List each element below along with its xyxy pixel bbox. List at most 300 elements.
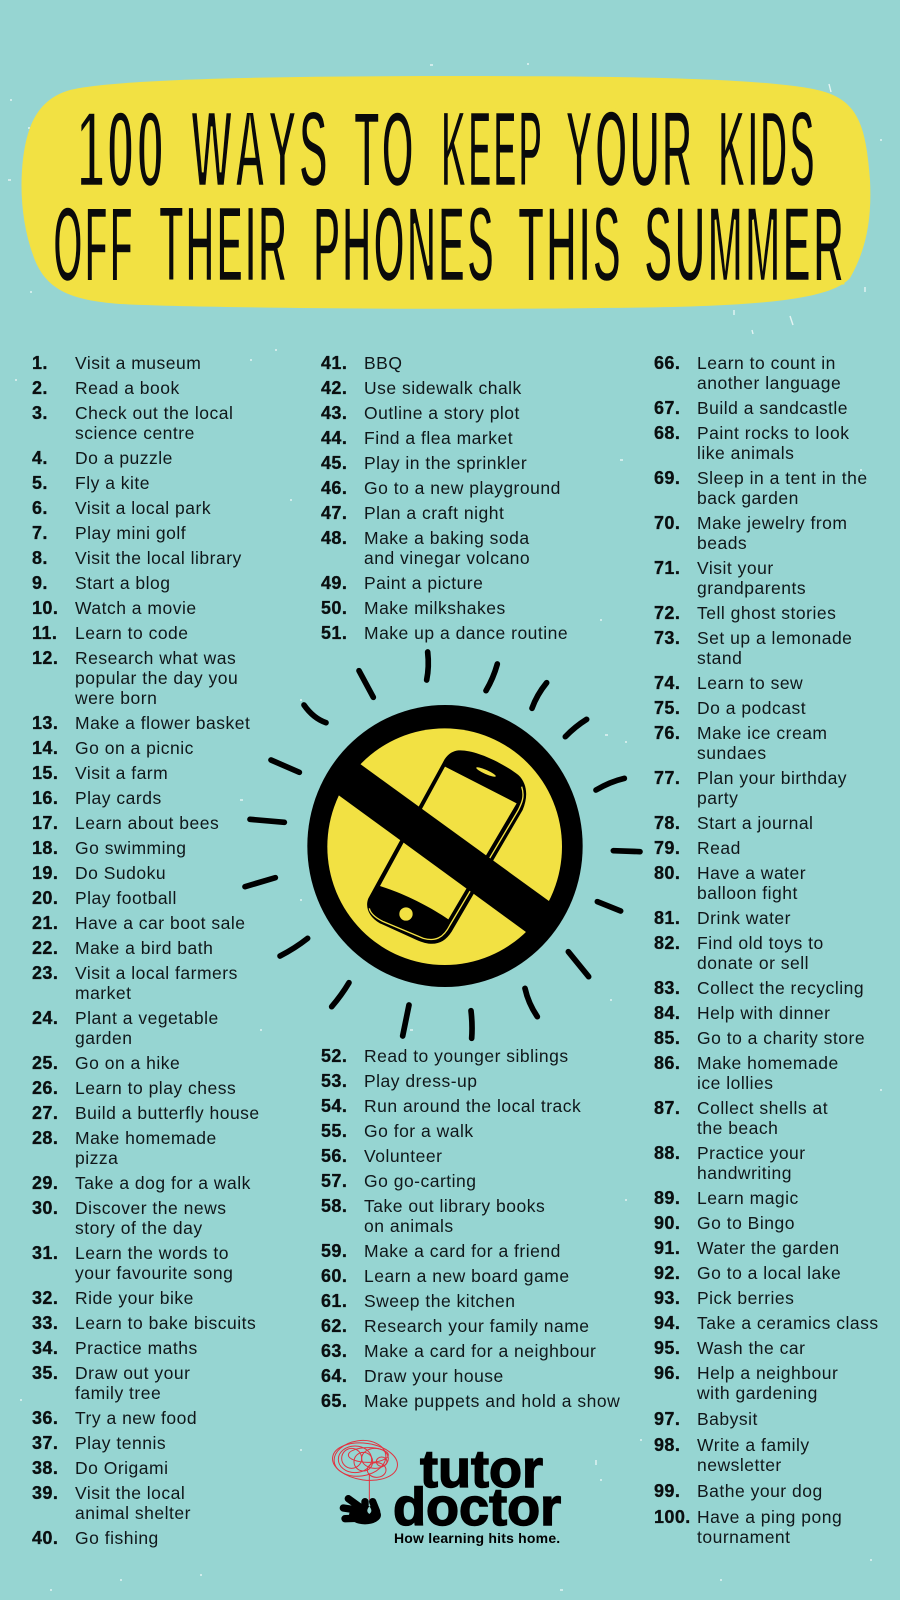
- item 18: 18.: [32, 838, 58, 858]
- item 9: [32, 573, 170, 593]
- item 24: Plant a vegetable: [75, 1008, 219, 1028]
- sign disc: [307, 705, 583, 987]
- item 28: pizza: [75, 1148, 118, 1168]
- item 35: family tree: [75, 1383, 161, 1403]
- item 17: 17.: [32, 813, 58, 833]
- item 66: Learn to count in: [697, 353, 836, 373]
- item 68: like animals: [697, 443, 794, 463]
- item 67: 67.: [654, 398, 680, 418]
- item 52: Read to younger siblings: [364, 1046, 569, 1066]
- item 65: 65.: [321, 1391, 347, 1411]
- item 9: Start a blog: [75, 573, 170, 593]
- title text: THIS: [518, 182, 623, 306]
- item 42: 42.: [321, 378, 347, 398]
- item 82: donate or sell: [697, 953, 809, 973]
- item 79: [654, 838, 879, 858]
- item 37: [32, 1433, 166, 1453]
- item 91: 91.: [654, 1238, 680, 1258]
- item 15: 15.: [32, 763, 58, 783]
- item 51: 51.: [321, 623, 347, 643]
- item 3: 3.: [32, 403, 48, 423]
- item 38: Do Origami: [75, 1458, 168, 1478]
- item 69: Sleep in a tent in the: [697, 468, 868, 488]
- item 31: 31.: [32, 1243, 58, 1263]
- item 73: 73.: [654, 628, 680, 648]
- item 98: [654, 1435, 879, 1475]
- item 34: Practice maths: [75, 1338, 198, 1358]
- item 24: 24.: [32, 1008, 58, 1028]
- item 90: 90.: [654, 1213, 680, 1233]
- item 30: 30.: [32, 1198, 58, 1218]
- item 73: stand: [697, 648, 742, 668]
- item 66: 66.: [654, 353, 680, 373]
- item 86: ice lollies: [697, 1073, 774, 1093]
- item 3: science centre: [75, 423, 195, 443]
- item 97: [654, 1409, 879, 1429]
- item 82: Find old toys to: [697, 933, 824, 953]
- item 70: [654, 513, 879, 553]
- item 3: Check out the local: [75, 403, 233, 423]
- item 59: [321, 1241, 620, 1261]
- item 30: [32, 1198, 226, 1238]
- item 5: 5.: [32, 473, 48, 493]
- item 77: 77.: [654, 768, 680, 788]
- list column 2 bottom: items 52 to 65: [321, 1046, 620, 1416]
- item 56: 56.: [321, 1146, 347, 1166]
- item 91: [654, 1238, 879, 1258]
- item 40: [32, 1528, 260, 1548]
- list column 1: items 1 to 40: [32, 353, 260, 1548]
- item 45: 45.: [321, 453, 347, 473]
- wordmark: doctor: [393, 1478, 561, 1537]
- icon: red scribble brain: [330, 1437, 400, 1500]
- item 71: Visit your: [697, 558, 774, 578]
- item 37: Play tennis: [75, 1433, 166, 1453]
- item 100: 100.: [654, 1507, 691, 1527]
- item 80: Have a water: [697, 863, 806, 883]
- item 33: Learn to bake biscuits: [75, 1313, 256, 1333]
- item 23: [32, 963, 238, 1003]
- banner shape: [21, 76, 870, 309]
- title text: WAYS: [191, 87, 330, 211]
- item 68: Paint rocks to look: [697, 423, 849, 443]
- item 93: [654, 1288, 879, 1308]
- item 48: and vinegar volcano: [364, 548, 530, 568]
- item 58: 58.: [321, 1196, 347, 1216]
- item 99: [654, 1481, 879, 1501]
- item 55: Go for a walk: [364, 1121, 474, 1141]
- item 95: [654, 1338, 879, 1358]
- item 15: [32, 763, 168, 783]
- item 87: [654, 1098, 879, 1138]
- item 45: Play in the sprinkler: [364, 453, 527, 473]
- item 87: 87.: [654, 1098, 680, 1118]
- item 84: 84.: [654, 1003, 680, 1023]
- item 52: 52.: [321, 1046, 347, 1066]
- item 81: [654, 908, 879, 928]
- item 23: Visit a local farmers: [75, 963, 238, 983]
- item 19: 19.: [32, 863, 58, 883]
- item 5: Fly a kite: [75, 473, 150, 493]
- item 47: Plan a craft night: [364, 503, 504, 523]
- item 61: 61.: [321, 1291, 347, 1311]
- item 49: 49.: [321, 573, 347, 593]
- item 39: animal shelter: [75, 1503, 191, 1523]
- item 73: [654, 628, 879, 668]
- item 66: [654, 353, 879, 393]
- item 1: 1.: [32, 353, 48, 373]
- item 98: Write a family: [697, 1435, 810, 1455]
- item 85: Go to a charity store: [697, 1028, 865, 1048]
- item 72: Tell ghost stories: [697, 603, 836, 623]
- phone: [367, 750, 526, 944]
- item 49: Paint a picture: [364, 573, 483, 593]
- item 64: 64.: [321, 1366, 347, 1386]
- item 4: 4.: [32, 448, 48, 468]
- list column 2 top: items 41 to 51: [321, 353, 568, 648]
- item 29: 29.: [32, 1173, 58, 1193]
- tagline: How learning hits home.: [394, 1530, 560, 1546]
- item 39: [32, 1483, 191, 1523]
- item 7: Play mini golf: [75, 523, 186, 543]
- item 93: 93.: [654, 1288, 680, 1308]
- item 20: 20.: [32, 888, 58, 908]
- item 53: Play dress-up: [364, 1071, 478, 1091]
- item 23: market: [75, 983, 131, 1003]
- item 80: [654, 863, 879, 903]
- item 72: [654, 603, 879, 623]
- item 62: Research your family name: [364, 1316, 590, 1336]
- item 16: 16.: [32, 788, 58, 808]
- item 92: Go to a local lake: [697, 1263, 841, 1283]
- item 1: Visit a museum: [75, 353, 201, 373]
- item 54: Run around the local track: [364, 1096, 581, 1116]
- item 72: 72.: [654, 603, 680, 623]
- item 50: [321, 598, 568, 618]
- item 34: 34.: [32, 1338, 58, 1358]
- item 30: Discover the news: [75, 1198, 226, 1218]
- wordmark: tutor: [420, 1440, 543, 1499]
- title text: YOUR: [565, 88, 694, 211]
- item 51: Make up a dance routine: [364, 623, 568, 643]
- item 41: 41.: [321, 353, 347, 373]
- item 43: Outline a story plot: [364, 403, 520, 423]
- item 3: [32, 403, 233, 443]
- item 58: [321, 1196, 620, 1236]
- item 24: garden: [75, 1028, 132, 1048]
- item 41: [321, 353, 568, 373]
- item 97: Babysit: [697, 1409, 758, 1429]
- item 37: 37.: [32, 1433, 58, 1453]
- item 94: 94.: [654, 1313, 680, 1333]
- item 99: Bathe your dog: [697, 1481, 823, 1501]
- item 96: [654, 1363, 879, 1403]
- item 86: 86.: [654, 1053, 680, 1073]
- item 12: were born: [75, 688, 157, 708]
- item 42: [321, 378, 568, 398]
- item 45: [321, 453, 568, 473]
- item 27: 27.: [32, 1103, 58, 1123]
- item 44: Find a flea market: [364, 428, 513, 448]
- item 73: Set up a lemonade: [697, 628, 852, 648]
- item 70: Make jewelry from: [697, 513, 847, 533]
- item 20: Play football: [75, 888, 177, 908]
- item 38: [32, 1458, 168, 1478]
- title text: PHONES: [313, 183, 496, 306]
- item 10: 10.: [32, 598, 58, 618]
- item 69: 69.: [654, 468, 680, 488]
- item 88: handwriting: [697, 1163, 792, 1183]
- item 14: 14.: [32, 738, 58, 758]
- item 26: 26.: [32, 1078, 58, 1098]
- item 24: [32, 1008, 219, 1048]
- item 96: 96.: [654, 1363, 680, 1383]
- item 96: with gardening: [697, 1383, 818, 1403]
- item 84: [654, 1003, 879, 1023]
- item 40: 40.: [32, 1528, 58, 1548]
- item 89: 89.: [654, 1188, 680, 1208]
- item 87: the beach: [697, 1118, 778, 1138]
- item 8: Visit the local library: [75, 548, 242, 568]
- item 7: 7.: [32, 523, 48, 543]
- rays: [245, 652, 640, 1038]
- item 41: BBQ: [364, 353, 402, 373]
- item 14: Go on a picnic: [75, 738, 194, 758]
- item 69: back garden: [697, 488, 799, 508]
- item 68: [654, 423, 879, 463]
- item 18: Go swimming: [75, 838, 186, 858]
- item 49: [321, 573, 568, 593]
- item 88: Practice your: [697, 1143, 806, 1163]
- item 91: Water the garden: [697, 1238, 840, 1258]
- item 63: 63.: [321, 1341, 347, 1361]
- item 63: Make a card for a neighbour: [364, 1341, 596, 1361]
- item 80: balloon fight: [697, 883, 798, 903]
- item 15: Visit a farm: [75, 763, 168, 783]
- item 81: 81.: [654, 908, 680, 928]
- item 57: [321, 1171, 620, 1191]
- item 2: 2.: [32, 378, 48, 398]
- title text: OFF: [53, 183, 135, 306]
- item 36: Try a new food: [75, 1408, 197, 1428]
- item 21: Have a car boot sale: [75, 913, 246, 933]
- item 48: Make a baking soda: [364, 528, 530, 548]
- item 69: [654, 468, 879, 508]
- item 95: 95.: [654, 1338, 680, 1358]
- item 64: [321, 1366, 620, 1386]
- item 48: [321, 528, 568, 568]
- item 9: 9.: [32, 573, 48, 593]
- item 39: Visit the local: [75, 1483, 185, 1503]
- item 71: [654, 558, 879, 598]
- item 55: [321, 1121, 620, 1141]
- item 78: Start a journal: [697, 813, 813, 833]
- item 56: [321, 1146, 620, 1166]
- item 92: [654, 1263, 879, 1283]
- item 38: 38.: [32, 1458, 58, 1478]
- item 47: [321, 503, 568, 523]
- item 92: 92.: [654, 1263, 680, 1283]
- title text: SUMMER: [644, 182, 846, 306]
- item 30: story of the day: [75, 1218, 203, 1238]
- item 22: 22.: [32, 938, 58, 958]
- item 57: 57.: [321, 1171, 347, 1191]
- item 59: Make a card for a friend: [364, 1241, 561, 1261]
- item 74: Learn to sew: [697, 673, 803, 693]
- item 12: popular the day you: [75, 668, 238, 688]
- item 44: [321, 428, 568, 448]
- item 8: 8.: [32, 548, 48, 568]
- item 32: Ride your bike: [75, 1288, 194, 1308]
- item 85: 85.: [654, 1028, 680, 1048]
- title text: THEIR: [159, 182, 289, 306]
- item 98: newsletter: [697, 1455, 782, 1475]
- item 77: Plan your birthday: [697, 768, 847, 788]
- item 16: [32, 788, 162, 808]
- item 61: [321, 1291, 620, 1311]
- item 17: Learn about bees: [75, 813, 219, 833]
- item 31: Learn the words to: [75, 1243, 229, 1263]
- item 100: Have a ping pong: [697, 1507, 842, 1527]
- item 59: 59.: [321, 1241, 347, 1261]
- item 79: Read: [697, 838, 741, 858]
- title text: KEEP: [441, 89, 544, 211]
- item 25: Go on a hike: [75, 1053, 180, 1073]
- item 53: [321, 1071, 620, 1091]
- item 86: Make homemade: [697, 1053, 839, 1073]
- item 60: Learn a new board game: [364, 1266, 570, 1286]
- item 6: Visit a local park: [75, 498, 211, 518]
- item 16: Play cards: [75, 788, 162, 808]
- item 77: party: [697, 788, 738, 808]
- item 86: [654, 1053, 879, 1093]
- sign inner yellow: [327, 728, 562, 965]
- item 64: Draw your house: [364, 1366, 504, 1386]
- item 27: Build a butterfly house: [75, 1103, 260, 1123]
- item 10: Watch a movie: [75, 598, 197, 618]
- item 66: another language: [697, 373, 841, 393]
- title text: KIDS: [718, 88, 817, 211]
- item 25: 25.: [32, 1053, 58, 1073]
- item 100: [654, 1507, 879, 1547]
- item 68: 68.: [654, 423, 680, 443]
- item 4: Do a puzzle: [75, 448, 173, 468]
- item 12: 12.: [32, 648, 58, 668]
- item 55: 55.: [321, 1121, 347, 1141]
- item 43: [321, 403, 568, 423]
- item 71: 71.: [654, 558, 680, 578]
- item 53: 53.: [321, 1071, 347, 1091]
- item 62: 62.: [321, 1316, 347, 1336]
- item 12: [32, 648, 238, 708]
- title text: TO: [354, 88, 416, 211]
- item 67: [654, 398, 879, 418]
- item 50: 50.: [321, 598, 347, 618]
- item 83: Collect the recycling: [697, 978, 864, 998]
- item 23: 23.: [32, 963, 58, 983]
- item 29: Take a dog for a walk: [75, 1173, 251, 1193]
- item 93: Pick berries: [697, 1288, 794, 1308]
- item 65: Make puppets and hold a show: [364, 1391, 620, 1411]
- item 13: Make a flower basket: [75, 713, 250, 733]
- item 44: 44.: [321, 428, 347, 448]
- item 52: [321, 1046, 620, 1066]
- item 5: [32, 473, 150, 493]
- item 46: 46.: [321, 478, 347, 498]
- item 100: tournament: [697, 1527, 791, 1547]
- item 39: 39.: [32, 1483, 58, 1503]
- item 61: Sweep the kitchen: [364, 1291, 516, 1311]
- item 75: [654, 698, 879, 718]
- item 75: Do a podcast: [697, 698, 806, 718]
- item 46: Go to a new playground: [364, 478, 561, 498]
- item 96: Help a neighbour: [697, 1363, 838, 1383]
- item 22: Make a bird bath: [75, 938, 213, 958]
- item 74: [654, 673, 879, 693]
- item 88: [654, 1143, 879, 1183]
- item 70: 70.: [654, 513, 680, 533]
- item 28: Make homemade: [75, 1128, 217, 1148]
- item 19: Do Sudoku: [75, 863, 166, 883]
- item 28: 28.: [32, 1128, 58, 1148]
- list column 3: items 66 to 100: [654, 353, 879, 1552]
- item 21: 21.: [32, 913, 58, 933]
- item 2: Read a book: [75, 378, 180, 398]
- item 19: [32, 863, 166, 883]
- item 78: 78.: [654, 813, 680, 833]
- item 58: Take out library books: [364, 1196, 545, 1216]
- item 77: [654, 768, 879, 808]
- item 57: Go go-carting: [364, 1171, 477, 1191]
- item 89: [654, 1188, 879, 1208]
- item 54: 54.: [321, 1096, 347, 1116]
- item 90: [654, 1213, 879, 1233]
- title text: 100: [77, 89, 166, 212]
- item 82: [654, 933, 879, 973]
- item 6: 6.: [32, 498, 48, 518]
- item 50: Make milkshakes: [364, 598, 506, 618]
- item 32: 32.: [32, 1288, 58, 1308]
- item 75: 75.: [654, 698, 680, 718]
- item 76: 76.: [654, 723, 680, 743]
- item 82: 82.: [654, 933, 680, 953]
- item 78: [654, 813, 879, 833]
- item 98: 98.: [654, 1435, 680, 1455]
- item 13: 13.: [32, 713, 58, 733]
- item 35: Draw out your: [75, 1363, 190, 1383]
- item 12: Research what was: [75, 648, 236, 668]
- item 48: 48.: [321, 528, 347, 548]
- item 60: 60.: [321, 1266, 347, 1286]
- wordmark: [393, 1440, 561, 1537]
- item 47: 47.: [321, 503, 347, 523]
- item 42: Use sidewalk chalk: [364, 378, 522, 398]
- item 60: [321, 1266, 620, 1286]
- item 35: 35.: [32, 1363, 58, 1383]
- item 11: Learn to code: [75, 623, 189, 643]
- item 83: 83.: [654, 978, 680, 998]
- item 67: Build a sandcastle: [697, 398, 848, 418]
- title text: [53, 87, 846, 306]
- item 94: Take a ceramics class: [697, 1313, 879, 1333]
- item 90: Go to Bingo: [697, 1213, 795, 1233]
- item 76: sundaes: [697, 743, 767, 763]
- item 40: Go fishing: [75, 1528, 159, 1548]
- item 28: [32, 1128, 217, 1168]
- item 97: 97.: [654, 1409, 680, 1429]
- item 80: 80.: [654, 863, 680, 883]
- item 31: your favourite song: [75, 1263, 233, 1283]
